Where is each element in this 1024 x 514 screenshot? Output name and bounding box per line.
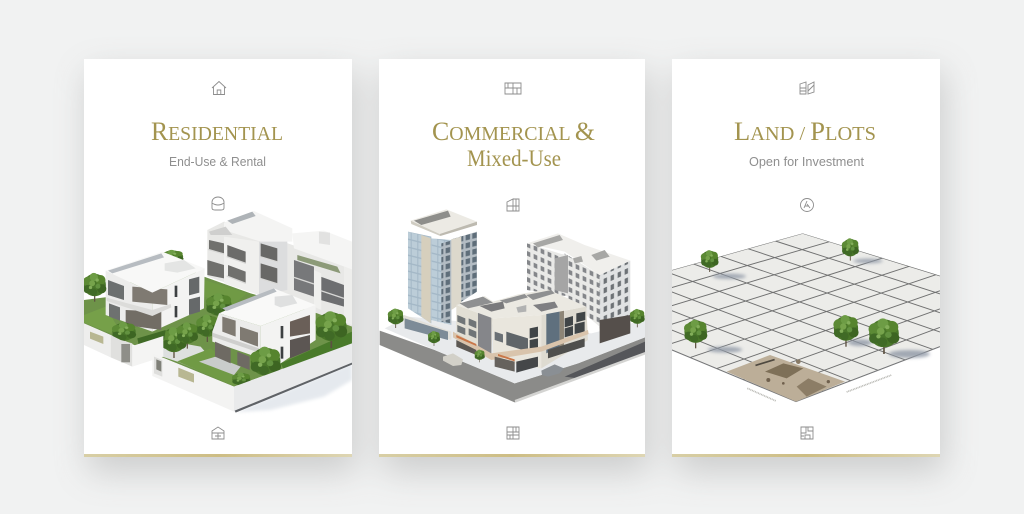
cars: [443, 353, 463, 366]
heading: commercial and mixed-use: COMMERCIAL &: [432, 117, 595, 146]
heading: land and plots: LAND / PLOTS: [734, 117, 876, 146]
front-left house: [106, 252, 205, 332]
panel: residential: [83, 59, 352, 457]
illustration: land grid: [672, 233, 940, 402]
icon: map: [800, 82, 814, 94]
plot front edge: [672, 347, 940, 402]
wall shadow: [236, 363, 352, 412]
icon: window grid: [507, 427, 519, 439]
front low building: [453, 289, 589, 373]
icon: plot map: [801, 427, 813, 439]
icon: storefront: [505, 83, 521, 94]
rear white building: [527, 233, 630, 343]
panel: commercial: [379, 59, 645, 457]
rear apartment block: [207, 211, 352, 327]
gold strip: [672, 454, 940, 457]
icon: dome badge: [212, 197, 224, 210]
grid lines: [672, 234, 940, 395]
tree shadows: [708, 259, 930, 358]
sidewalk: [385, 317, 645, 383]
garden trees: [83, 273, 106, 302]
road: [380, 331, 645, 402]
panel: land: [672, 59, 940, 457]
survey annotations: [747, 375, 892, 401]
gold strip: [84, 454, 352, 457]
subtitle: open for investment: Open for Investment: [749, 155, 865, 169]
plot plane: [672, 233, 940, 402]
tree behind house: [164, 250, 184, 260]
perimeter walls: [84, 323, 352, 413]
street trees: [388, 308, 404, 328]
trees: [701, 250, 719, 272]
subtitle: end-use and rental: End-Use & Rental: [169, 155, 266, 169]
gold strip: [379, 454, 645, 457]
front-right house: [212, 288, 316, 370]
icon: house with grid: [212, 427, 224, 439]
icon: house: [212, 82, 226, 94]
front garden: [281, 332, 352, 370]
excavated plot: [727, 355, 845, 402]
tower: [404, 209, 477, 340]
icon: windows: [507, 199, 519, 211]
heading: commercial and mixed-use: Mixed-Use: [467, 146, 561, 171]
icon: circle marker: [800, 198, 814, 212]
heading: commercial and mixed-use: [432, 117, 595, 171]
illustration: residential complex: [83, 211, 352, 413]
heading: residential: RESIDENTIAL: [151, 117, 283, 146]
illustration: commercial block: [380, 209, 645, 403]
card shadows: [88, 72, 944, 472]
ground and lawn: [84, 272, 352, 386]
